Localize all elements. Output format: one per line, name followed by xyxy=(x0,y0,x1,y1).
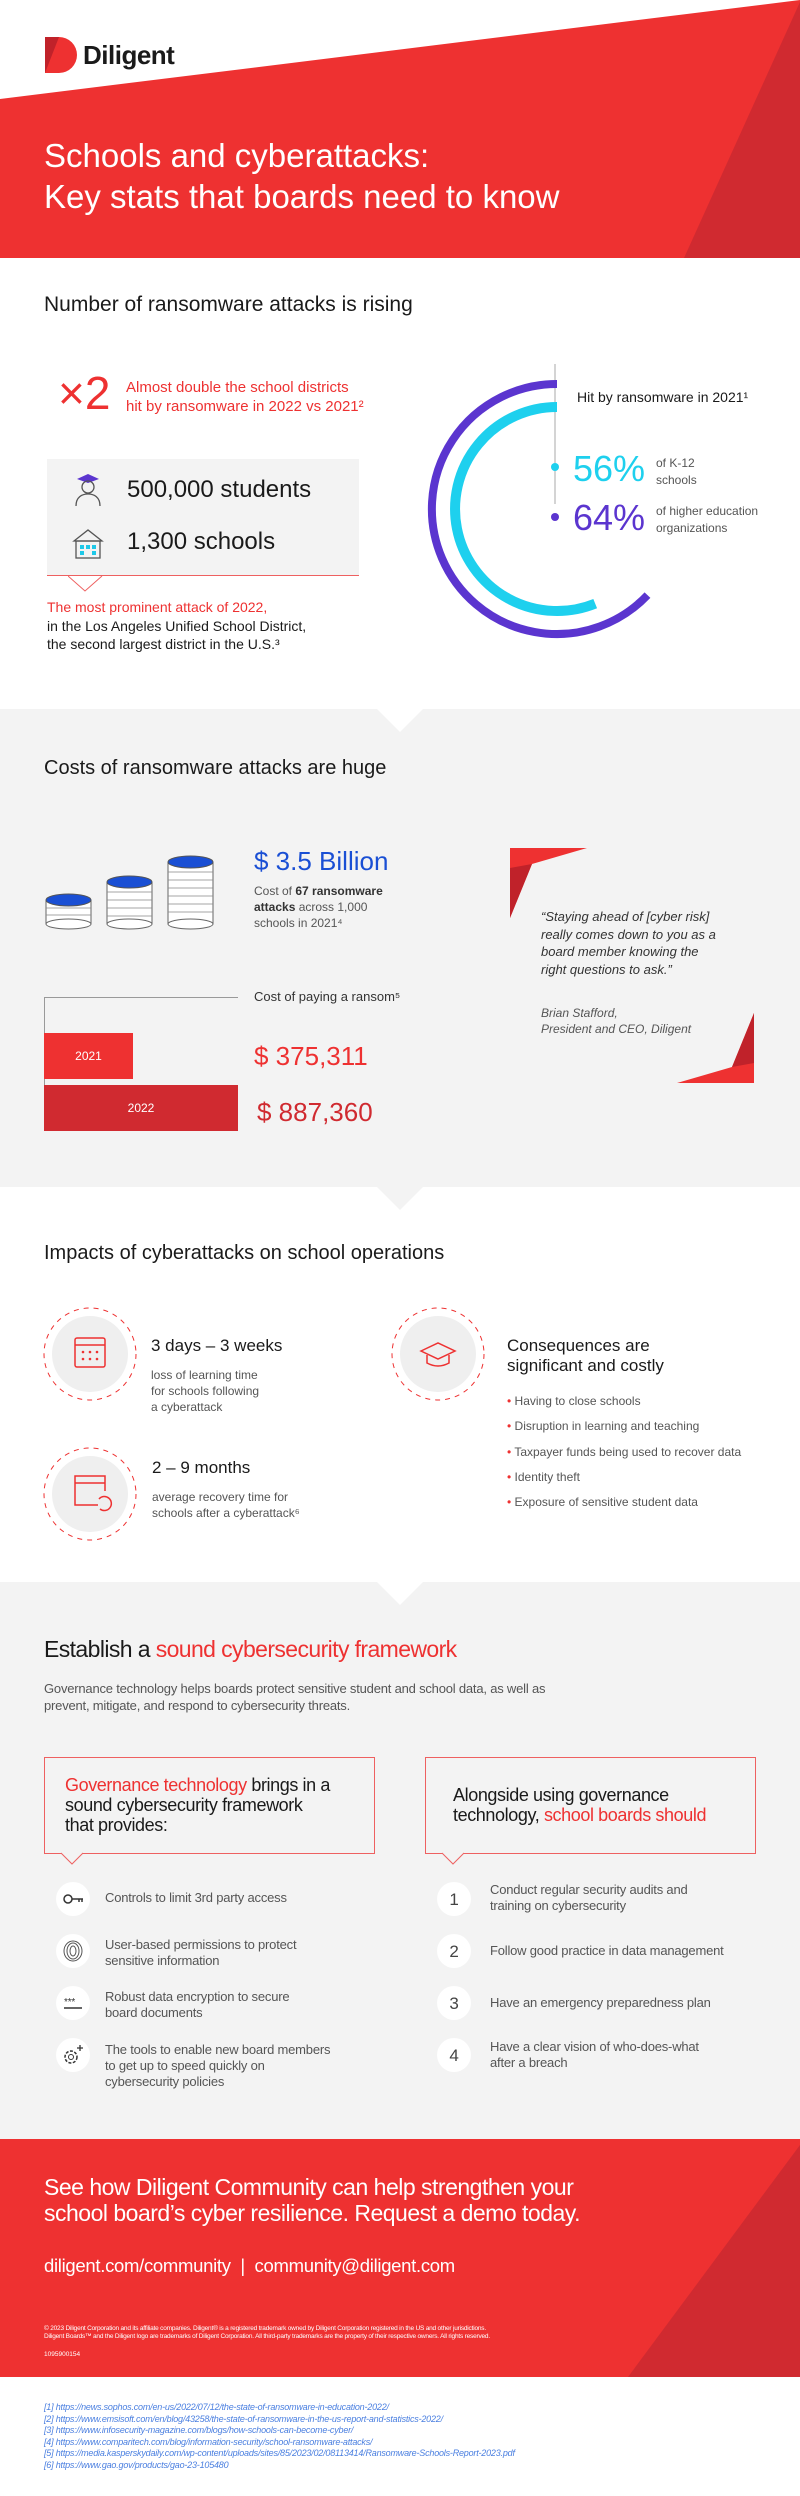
list: consequences: • Identity theft xyxy=(507,1470,580,1484)
icon: quote corner bottom xyxy=(677,1013,754,1083)
callout: most prominent attack: The most prominent attack of 2022, xyxy=(47,599,267,615)
list: consequences: • Exposure of sensitive student data xyxy=(507,1495,698,1509)
panel: school boards should box: technology, school boards should xyxy=(453,1805,706,1825)
impact: 3 days: 3 days – 3 weeks xyxy=(151,1336,282,1355)
list: governance features: The tools to enable new board members xyxy=(105,2042,330,2057)
list: school boards actions: Have a clear vision of who-does-what xyxy=(490,2039,699,2054)
bar chart: cost of ransom: 2021 xyxy=(75,1049,102,1063)
stat: 64%: organizations xyxy=(656,521,727,535)
list: governance features: User-based permissions to protect xyxy=(105,1937,296,1952)
text: Hit by ransomware in 2021¹ xyxy=(577,389,748,405)
title xyxy=(44,137,560,215)
icon: password: *** xyxy=(64,1997,75,2008)
icon: number 3: 3 xyxy=(449,1994,459,2013)
section background: costs xyxy=(0,709,800,1210)
stat: 3.5 billion: attacks across 1,000 xyxy=(254,900,367,914)
quote: right questions to ask.” xyxy=(541,962,672,976)
stat: x2 xyxy=(58,367,364,419)
icon: number 3 xyxy=(437,1986,471,2020)
stat: 64%: of higher education xyxy=(656,504,758,518)
list: governance features: Controls to limit 3rd party access xyxy=(105,1890,287,1905)
icon: gear xyxy=(56,2038,90,2072)
references: [6] https://www.gao.gov/products/gao-23-105480 xyxy=(44,2460,228,2470)
list: school boards actions xyxy=(437,1882,724,2072)
logo: Diligent xyxy=(83,40,174,70)
bar chart: cost of ransom xyxy=(44,989,400,1131)
header background xyxy=(0,0,800,258)
icon: quote corner top xyxy=(510,848,587,918)
stat: x2: ×2 xyxy=(58,367,110,419)
quote: really comes down to you as a xyxy=(541,926,716,942)
text: framework intro: Governance technology helps boards protect sensitive student and school data, as well as xyxy=(44,1681,545,1696)
quote: board member knowing the xyxy=(541,944,699,959)
panel: LA attack stats xyxy=(47,459,359,576)
bar chart: cost of ransom: $ 375,311 xyxy=(254,1041,368,1071)
references: [4] https://www.comparitech.com/blog/information-security/school-ransomware-attacks/ xyxy=(44,2436,372,2446)
list: consequences: • Having to close schools xyxy=(507,1394,641,1408)
icon: student xyxy=(75,474,101,506)
bar chart: cost of ransom: Cost of paying a ransom⁵ xyxy=(254,989,400,1004)
notch xyxy=(68,576,102,592)
heading: impacts: Impacts of cyberattacks on school operations xyxy=(44,1242,444,1264)
text: framework intro: prevent, mitigate, and respond to cybersecurity threats. xyxy=(44,1698,350,1712)
list: school boards actions: training on cybersecurity xyxy=(490,1898,626,1913)
footer call to action: Diligent Boards™ and the Diligent logo are trademarks of Diligent Corporation. All third-party trademarks are the property of their respective owners. All rights reserved. xyxy=(44,2332,490,2340)
stat: 56%: 56% xyxy=(573,448,645,489)
impact: 2-9 months: average recovery time for xyxy=(152,1490,288,1504)
list: governance features xyxy=(56,1882,330,2089)
icon: number 2 xyxy=(437,1934,471,1968)
stat: 64% xyxy=(573,497,758,538)
footer call to action xyxy=(0,2139,800,2377)
stat: 56%: of K-12 xyxy=(656,456,695,470)
impact: 2-9 months: schools after a cyberattack⁶ xyxy=(152,1506,300,1520)
stat: 3.5 billion: $ 3.5 Billion xyxy=(254,846,388,876)
stat: 3.5 billion: schools in 2021⁴ xyxy=(254,916,343,930)
icon: coin stacks xyxy=(46,856,214,930)
list: governance features: board documents xyxy=(105,2005,202,2020)
list: governance features: Robust data encryption to secure xyxy=(105,1989,289,2004)
icon: password xyxy=(56,1986,90,2020)
footer call to action: See how Diligent Community can help strengthen your xyxy=(44,2174,573,2200)
icon: calendar xyxy=(44,1308,136,1400)
references: [1] https://news.sophos.com/en-us/2022/07/12/the-state-of-ransomware-in-education-2022/ xyxy=(44,2402,389,2412)
callout: most prominent attack xyxy=(47,599,306,652)
impact: 2-9 months xyxy=(44,1448,300,1540)
heading: framework: Establish a sound cybersecurity framework xyxy=(44,1636,457,1662)
impact: consequences: Consequences are xyxy=(507,1336,650,1355)
quote: Brian Stafford, xyxy=(541,1006,618,1020)
list: governance features: sensitive information xyxy=(105,1953,219,1968)
quote: President and CEO, Diligent xyxy=(541,1022,691,1036)
text: a cyberattack xyxy=(151,1400,222,1414)
quote xyxy=(510,848,754,1083)
panel: school boards should box: Alongside using governance xyxy=(453,1785,669,1805)
list: school boards actions: Follow good practice in data management xyxy=(490,1943,724,1958)
panel: school boards should box xyxy=(425,1757,756,1854)
footer call to action: © 2023 Diligent Corporation and its affiliate companies. Diligent® is a registered trademark owned by Diligent Corporation registered in the US and other jurisdictions. xyxy=(44,2325,486,2332)
stat: 3.5 billion: Cost of 67 ransomware xyxy=(254,884,383,898)
list: school boards actions: Have an emergency preparedness plan xyxy=(490,1995,711,2010)
footer call to action: diligent.com/community | community@diligent.com xyxy=(44,2255,455,2276)
panel: governance technology box: that provides: xyxy=(65,1815,167,1835)
footer call to action: school board’s cyber resilience. Request a demo today. xyxy=(44,2200,580,2226)
list: governance features: cybersecurity policies xyxy=(105,2074,224,2089)
stat: 3.5 billion xyxy=(254,846,388,930)
icon: graduation cap xyxy=(392,1308,484,1400)
icon: number 1: 1 xyxy=(449,1890,459,1909)
panel: LA attack stats: 500,000 students xyxy=(127,476,311,503)
icon: number 2: 2 xyxy=(449,1942,459,1961)
bar chart: cost of ransom: $ 887,360 xyxy=(257,1097,373,1127)
stat: 56% xyxy=(573,448,697,489)
panel: governance technology box: Governance technology brings in a xyxy=(65,1775,330,1795)
section background: framework xyxy=(0,1582,800,2139)
references: [2] https://www.emsisoft.com/en/blog/43258/the-state-of-ransomware-in-the-us-report-and-statistics-2022/ xyxy=(44,2414,443,2424)
panel: governance technology box: sound cybersecurity framework xyxy=(65,1795,302,1815)
text: framework intro xyxy=(44,1681,545,1712)
impact: consequences: significant and costly xyxy=(507,1356,664,1375)
list: governance features: to get up to speed quickly on xyxy=(105,2058,265,2073)
bar chart: cost of ransom: 2022 xyxy=(128,1101,154,1115)
callout: most prominent attack: in the Los Angeles Unified School District, xyxy=(47,618,306,634)
list: consequences xyxy=(507,1394,742,1509)
icon: number 4: 4 xyxy=(449,2046,459,2065)
stat: 64%: 64% xyxy=(573,497,645,538)
heading: costs: Costs of ransomware attacks are huge xyxy=(44,757,386,779)
list: school boards actions: Conduct regular security audits and xyxy=(490,1882,688,1897)
references xyxy=(44,2402,516,2470)
references: [5] https://media.kasperskydaily.com/wp-content/uploads/sites/85/2023/02/08113414/Ransomware-Schools-Report-2023.pdf xyxy=(44,2448,515,2458)
list: consequences: • Disruption in learning and teaching xyxy=(507,1419,699,1433)
title: Schools and cyberattacks: xyxy=(44,137,429,174)
chart: donut hit by ransomware xyxy=(428,364,650,638)
references: [3] https://www.infosecurity-magazine.com/blogs/how-schools-can-become-cyber/ xyxy=(44,2425,353,2435)
icon: fingerprint xyxy=(56,1934,90,1968)
title: Key stats that boards need to know xyxy=(44,178,559,215)
panel: governance technology box xyxy=(44,1757,375,1854)
stat: x2: Almost double the school districts xyxy=(126,379,349,396)
logo xyxy=(45,37,174,73)
footer call to action: 1095900154 xyxy=(44,2351,80,2358)
impact: consequences xyxy=(392,1308,742,1509)
icon: calendar refresh xyxy=(44,1448,136,1540)
quote: “Staying ahead of [cyber risk] xyxy=(541,909,709,924)
list: school boards actions: after a breach xyxy=(490,2055,567,2070)
stat: 56%: schools xyxy=(656,473,697,487)
impact: 3 days: loss of learning time xyxy=(151,1368,258,1382)
impact: 3 days xyxy=(44,1308,282,1414)
callout: most prominent attack: the second largest district in the U.S.³ xyxy=(47,636,280,652)
impact: 3 days: for schools following xyxy=(151,1384,259,1398)
icon: key xyxy=(56,1882,90,1916)
impact: 2-9 months: 2 – 9 months xyxy=(152,1458,250,1477)
stat: x2: hit by ransomware in 2022 vs 2021² xyxy=(126,398,364,415)
icon: number 4 xyxy=(437,2038,471,2072)
panel: LA attack stats: 1,300 schools xyxy=(127,528,275,555)
heading: ransomware rising: Number of ransomware attacks is rising xyxy=(44,293,413,316)
icon: school xyxy=(72,529,104,559)
list: consequences: • Taxpayer funds being used to recover data xyxy=(507,1445,741,1459)
icon: number 1 xyxy=(437,1882,471,1916)
